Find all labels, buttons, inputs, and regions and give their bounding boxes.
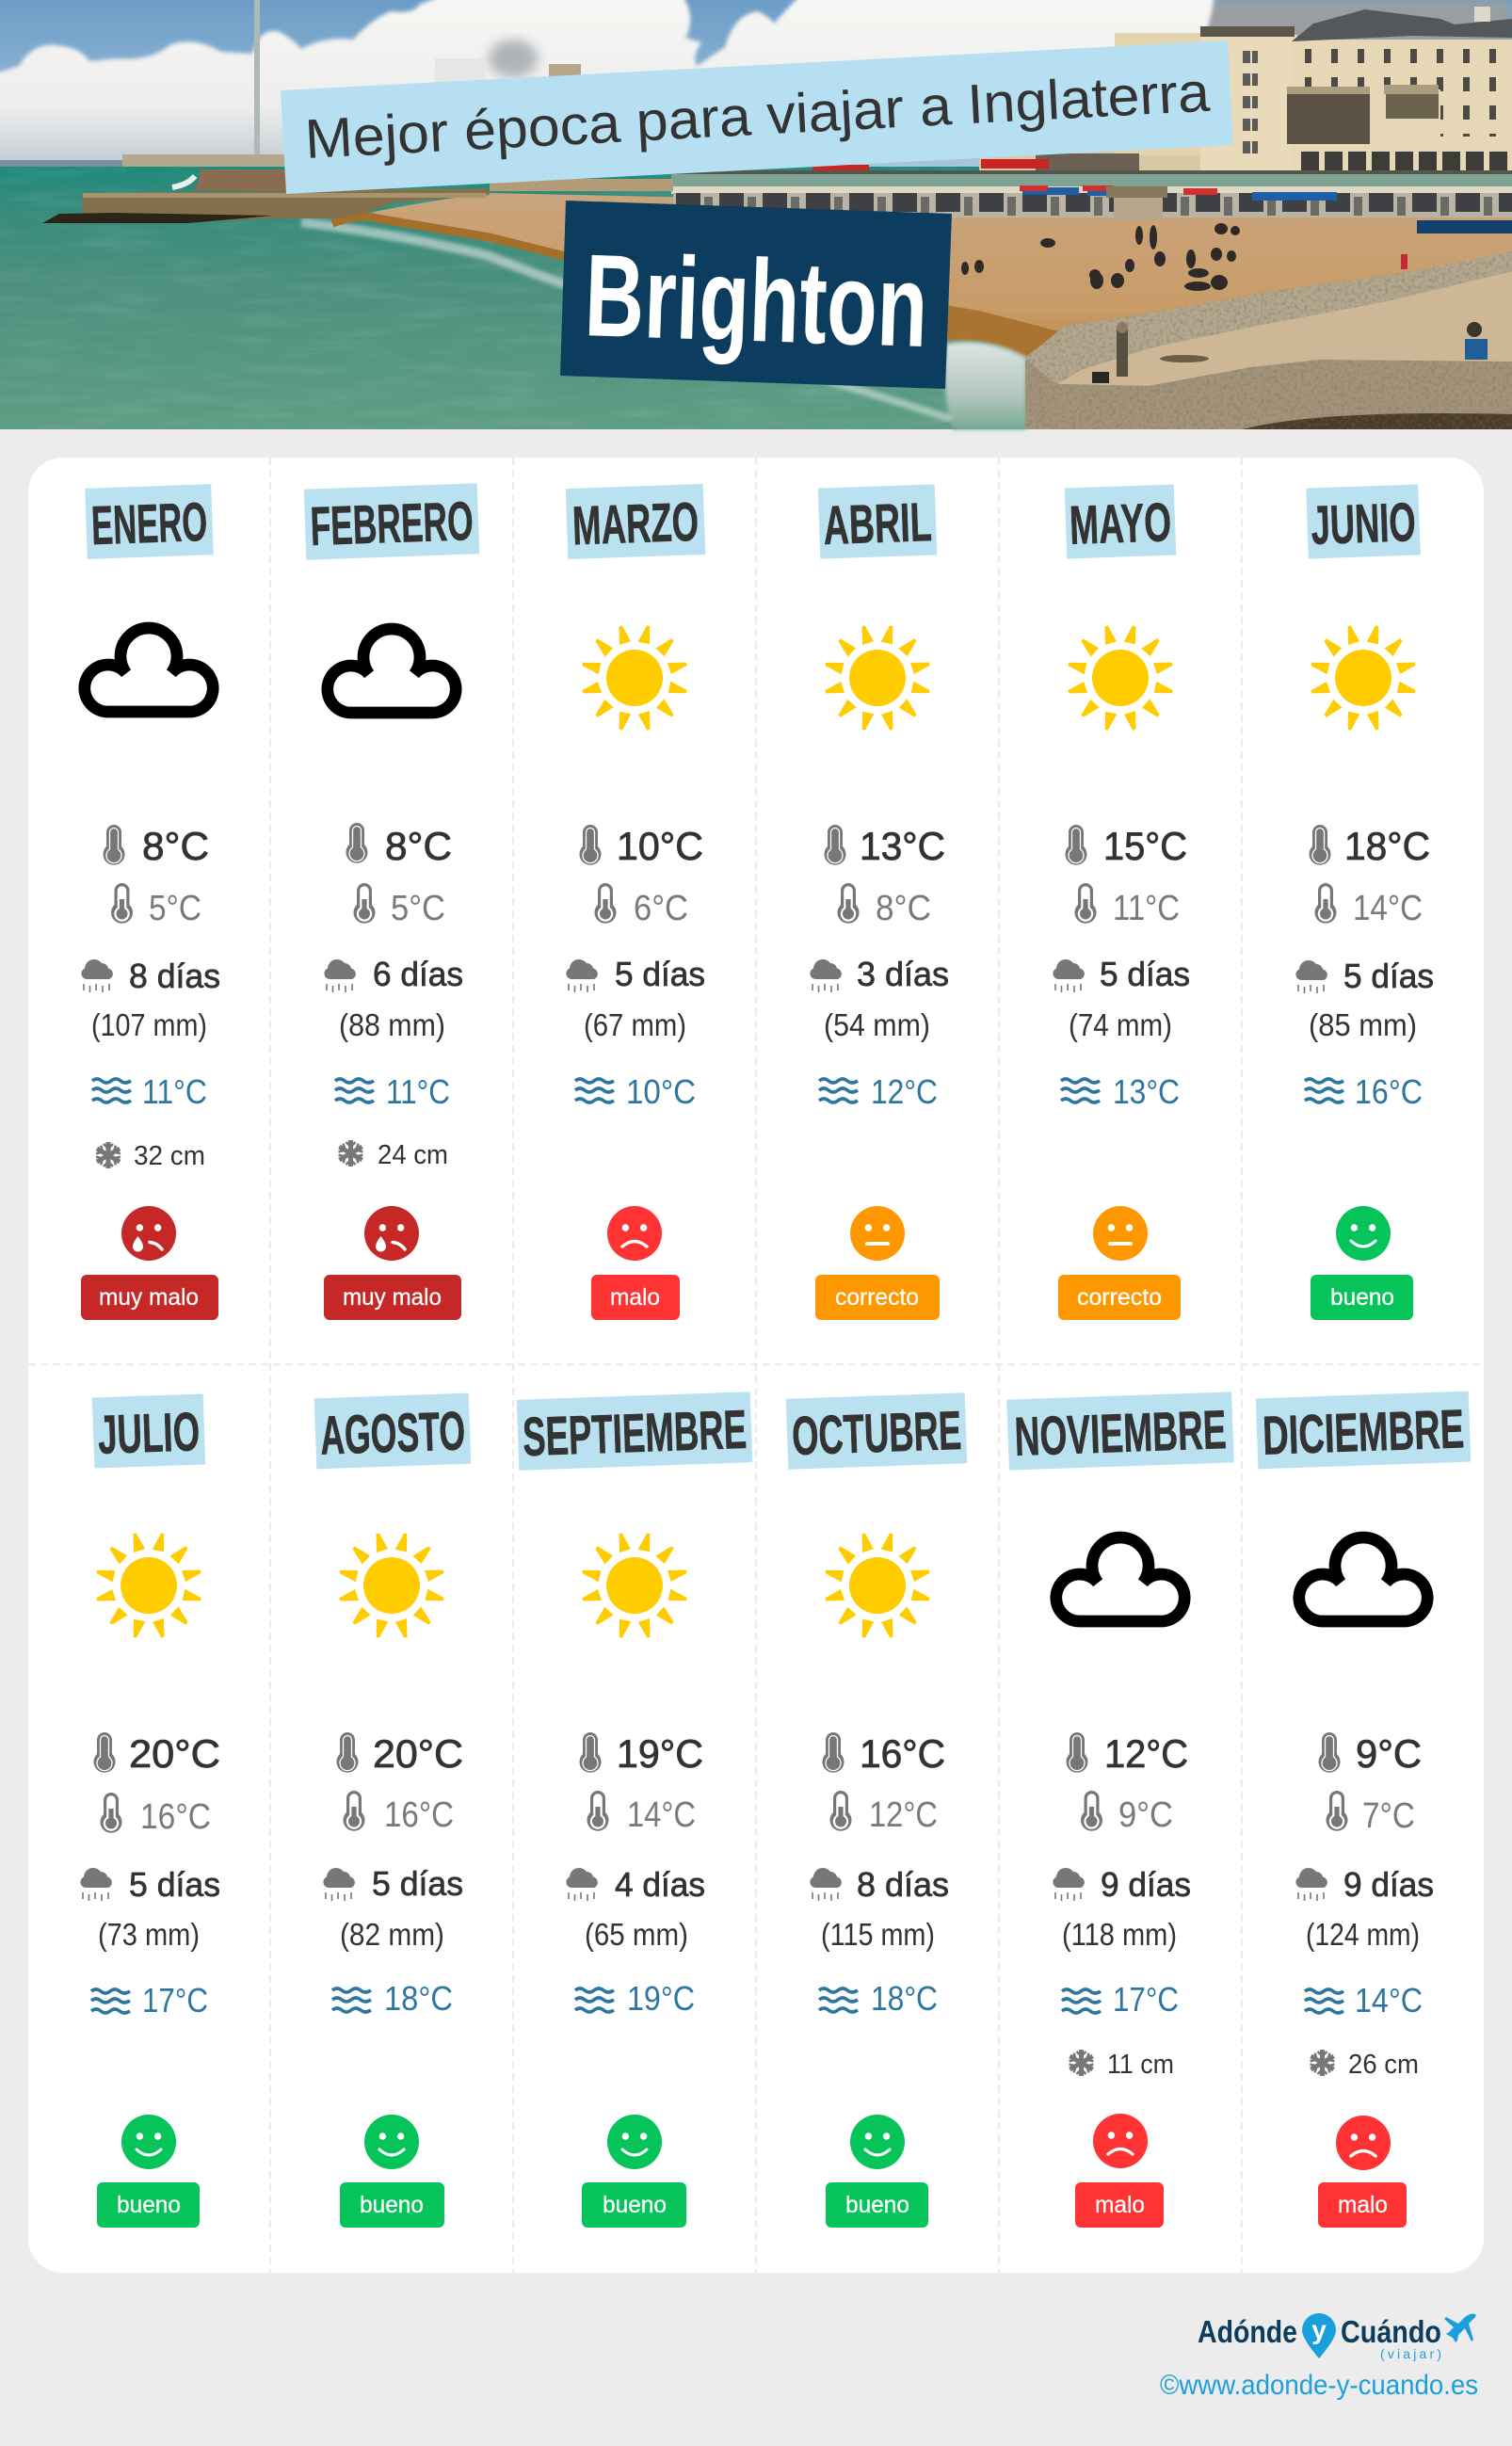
max temperature: 18°C	[1344, 824, 1430, 868]
max temperature: 8°C	[385, 824, 452, 868]
min temperature: 14°C	[627, 1795, 696, 1835]
snow	[94, 1141, 205, 1171]
max temperature	[1066, 1731, 1188, 1776]
rating label: correcto	[835, 1284, 919, 1311]
rating label	[591, 1275, 680, 1320]
max temperature: 16°C	[860, 1731, 945, 1776]
sea temperature	[819, 1072, 938, 1111]
icon: cloud	[328, 629, 456, 713]
footer logo: Cuándo	[1341, 2314, 1441, 2349]
column: septiembre	[517, 1392, 752, 2228]
sea temperature	[332, 1979, 453, 2018]
month heading	[85, 484, 214, 559]
snow	[1309, 2050, 1419, 2080]
rating label	[582, 2182, 686, 2228]
column: abril	[810, 484, 949, 1320]
max temperature	[337, 1731, 463, 1776]
max temperature: 20°C	[373, 1731, 463, 1776]
sea temperature	[91, 1981, 208, 2020]
icon: sun	[339, 1533, 444, 1638]
min temperature: 16°C	[140, 1797, 211, 1837]
sea temperature: 10°C	[626, 1072, 696, 1111]
min temperature	[1326, 1791, 1415, 1836]
footer logo: Adónde	[1198, 2314, 1297, 2349]
snow: 32 cm	[134, 1141, 205, 1171]
sea temperature	[819, 1979, 938, 2018]
rating label	[97, 2182, 200, 2228]
rating label	[826, 2182, 928, 2228]
min temperature: 11°C	[1113, 889, 1180, 928]
month heading	[1006, 1392, 1234, 1471]
icon: map pin	[1302, 2313, 1336, 2358]
rating label	[81, 1275, 218, 1320]
rating face	[607, 1206, 662, 1261]
max temperature	[823, 1731, 945, 1776]
rating face	[1336, 2116, 1391, 2170]
max temperature: 15°C	[1103, 824, 1187, 868]
column: febrero	[304, 483, 479, 1320]
min temperature	[838, 883, 931, 928]
min temperature: 12°C	[869, 1795, 938, 1835]
sea temperature: 14°C	[1355, 1981, 1423, 2020]
icon: sun	[825, 1533, 930, 1638]
month heading: MAYO	[1069, 491, 1172, 556]
max temperature	[825, 824, 945, 868]
rain days: 5 días	[615, 955, 705, 993]
rating face	[121, 1206, 176, 1261]
min temperature: 6°C	[634, 889, 688, 928]
min temperature: 5°C	[391, 889, 445, 928]
max temperature	[346, 823, 452, 868]
max temperature: 13°C	[860, 824, 945, 868]
rain days	[566, 1865, 705, 1904]
rain days: 5 días	[1100, 955, 1190, 993]
rainfall: (118 mm)	[1062, 1917, 1177, 1952]
rating label: muy malo	[343, 1284, 442, 1311]
month heading: SEPTIEMBRE	[522, 1399, 748, 1468]
rainfall: (88 mm)	[339, 1007, 445, 1042]
rain days	[1295, 1865, 1434, 1904]
city banner	[560, 201, 952, 389]
rating label	[324, 1275, 461, 1320]
max temperature: 20°C	[129, 1731, 220, 1776]
max temperature	[1309, 824, 1430, 868]
sea temperature: 17°C	[142, 1981, 208, 2020]
min temperature	[111, 883, 201, 928]
max temperature	[104, 824, 209, 868]
rainfall: (74 mm)	[1069, 1007, 1172, 1042]
rain days	[323, 1864, 463, 1903]
rating label: malo	[1095, 2192, 1145, 2218]
rating label: bueno	[1330, 1284, 1394, 1311]
min temperature: 7°C	[1362, 1796, 1415, 1836]
rating label: malo	[610, 1284, 660, 1311]
month heading: AGOSTO	[319, 1400, 466, 1467]
month heading	[304, 483, 479, 560]
min temperature: 9°C	[1118, 1795, 1173, 1835]
column: mayo	[1053, 484, 1190, 1320]
sea temperature	[335, 1072, 450, 1111]
title text: Mejor época para viajar a Inglaterra	[303, 61, 1212, 170]
max temperature: 19°C	[617, 1731, 703, 1776]
sea temperature	[1062, 1980, 1179, 2019]
sea temperature: 11°C	[142, 1072, 207, 1111]
rain days	[324, 955, 463, 993]
rating face	[364, 1206, 419, 1261]
rating label: malo	[1338, 2192, 1388, 2218]
month heading: NOVIEMBRE	[1014, 1399, 1228, 1468]
min temperature	[343, 1791, 454, 1835]
month heading: JUNIO	[1310, 491, 1417, 556]
column: enero	[81, 484, 220, 1320]
footer logo: (viajar)	[1380, 2346, 1441, 2361]
sea temperature: 12°C	[871, 1072, 938, 1111]
snow	[337, 1140, 448, 1170]
icon: sun	[582, 1533, 687, 1638]
city name: Brighton	[583, 231, 929, 372]
rain days: 5 días	[129, 1865, 220, 1904]
column: diciembre	[1256, 1392, 1471, 2228]
rain days: 9 días	[1101, 1865, 1191, 1904]
rating label: bueno	[603, 2192, 667, 2218]
min temperature	[354, 883, 445, 928]
sea temperature	[1305, 1981, 1423, 2020]
snow: 24 cm	[378, 1140, 448, 1170]
sea temperature	[1061, 1072, 1180, 1111]
min temperature	[1075, 883, 1180, 928]
column: junio	[1295, 484, 1434, 1320]
sea temperature: 19°C	[627, 1979, 695, 2018]
month heading: FEBRERO	[310, 491, 475, 557]
max temperature: 10°C	[617, 824, 703, 868]
sea temperature: 11°C	[386, 1072, 450, 1111]
rain days	[810, 955, 949, 993]
max temperature	[94, 1731, 220, 1776]
max temperature	[1318, 1731, 1422, 1776]
rating face	[1093, 2114, 1148, 2168]
rating label: correcto	[1077, 1284, 1162, 1311]
max temperature: 12°C	[1104, 1731, 1188, 1776]
rain days: 5 días	[372, 1864, 463, 1903]
min temperature: 16°C	[384, 1795, 454, 1835]
rating face	[1093, 1206, 1148, 1261]
rating label: bueno	[845, 2192, 909, 2218]
rating face	[364, 2115, 419, 2169]
month heading	[566, 484, 705, 559]
rain days: 9 días	[1343, 1865, 1434, 1904]
icon: cloud	[1056, 1537, 1184, 1621]
column: noviembre	[1006, 1392, 1234, 2228]
rating label	[340, 2182, 444, 2228]
rain days	[1053, 1865, 1191, 1904]
rating face	[850, 1206, 905, 1261]
rating label	[1058, 1275, 1181, 1320]
max temperature	[580, 824, 703, 868]
min temperature	[1314, 883, 1423, 928]
column: octubre	[786, 1392, 967, 2228]
rainfall: (67 mm)	[584, 1007, 686, 1042]
rating label	[1318, 2182, 1407, 2228]
month heading: OCTUBRE	[791, 1400, 962, 1467]
sea temperature: 18°C	[384, 1979, 453, 2018]
min temperature: 5°C	[149, 889, 201, 928]
icon: cloud	[85, 628, 213, 712]
month heading	[1306, 484, 1421, 559]
month heading: JULIO	[97, 1401, 201, 1466]
month heading	[818, 484, 937, 559]
sea temperature	[575, 1979, 695, 2018]
rain days	[81, 957, 220, 995]
rain days: 3 días	[857, 955, 949, 993]
min temperature	[1081, 1791, 1173, 1835]
footer url: ©www.adonde-y-cuando.es	[1160, 2370, 1478, 2401]
rainfall: (65 mm)	[585, 1917, 688, 1952]
min temperature: 8°C	[876, 889, 931, 928]
snow: 11 cm	[1107, 2050, 1174, 2080]
sea temperature: 17°C	[1113, 1980, 1179, 2019]
rating face	[607, 2115, 662, 2169]
rating face	[121, 2115, 176, 2169]
rating label	[1311, 1275, 1413, 1320]
month heading	[786, 1392, 967, 1470]
column: marzo	[566, 484, 705, 1320]
rating label: muy malo	[99, 1284, 199, 1311]
month heading: ABRIL	[822, 491, 933, 556]
month heading	[314, 1393, 471, 1469]
rain days	[810, 1865, 949, 1904]
icon: sun	[1311, 625, 1416, 731]
rain days: 8 días	[857, 1865, 949, 1904]
rating label	[1075, 2182, 1164, 2228]
sea temperature: 18°C	[871, 1979, 938, 2018]
rainfall: (73 mm)	[98, 1917, 200, 1952]
snow	[1068, 2050, 1174, 2080]
sea temperature: 13°C	[1113, 1072, 1180, 1111]
rainfall: (54 mm)	[824, 1007, 930, 1042]
header photo: Brighton beach	[0, 0, 1512, 429]
column: agosto	[314, 1393, 471, 2228]
sea temperature	[575, 1072, 696, 1111]
rainfall: (124 mm)	[1306, 1917, 1420, 1952]
footer logo: y	[1311, 2315, 1327, 2344]
sea temperature: 16°C	[1355, 1072, 1423, 1111]
rain days	[1053, 955, 1190, 993]
rain days	[80, 1865, 220, 1904]
rainfall: (82 mm)	[340, 1917, 444, 1952]
rating face	[1336, 1206, 1391, 1261]
title banner	[281, 40, 1233, 194]
rain days: 6 días	[373, 955, 463, 993]
white panel	[28, 458, 1484, 2273]
icon: cloud	[1299, 1537, 1427, 1621]
icon: sun	[825, 625, 930, 731]
icon: sun	[582, 625, 687, 731]
rainfall: (115 mm)	[821, 1917, 935, 1952]
sea temperature	[92, 1072, 207, 1111]
month heading: MARZO	[571, 491, 700, 556]
rain days: 5 días	[1343, 957, 1434, 995]
rating label	[815, 1275, 940, 1320]
min temperature	[830, 1791, 938, 1835]
rating label: bueno	[117, 2192, 181, 2218]
max temperature: 9°C	[1356, 1731, 1422, 1776]
rain days: 4 días	[615, 1865, 705, 1904]
max temperature	[1066, 824, 1187, 868]
rainfall: (85 mm)	[1309, 1007, 1417, 1042]
snow: 26 cm	[1348, 2050, 1419, 2080]
icon: plane	[1444, 2314, 1476, 2342]
max temperature: 8°C	[142, 824, 209, 868]
footer logo	[1198, 2313, 1476, 2361]
icon: sun	[96, 1533, 201, 1638]
rating label: bueno	[360, 2192, 424, 2218]
month heading: ENERO	[90, 491, 208, 556]
month heading	[517, 1392, 752, 1471]
min temperature	[100, 1793, 211, 1837]
rain days: 8 días	[129, 957, 220, 995]
min temperature: 14°C	[1353, 889, 1423, 928]
column: julio	[80, 1393, 220, 2228]
min temperature	[595, 883, 688, 928]
rainfall: (107 mm)	[91, 1007, 207, 1042]
month heading	[92, 1393, 205, 1469]
icon: sun	[1068, 625, 1173, 731]
max temperature	[580, 1731, 703, 1776]
min temperature	[587, 1791, 696, 1835]
rain days	[566, 955, 705, 993]
rating face	[850, 2115, 905, 2169]
sea temperature	[1305, 1072, 1423, 1111]
month heading	[1065, 484, 1176, 559]
rain days	[1295, 957, 1434, 995]
